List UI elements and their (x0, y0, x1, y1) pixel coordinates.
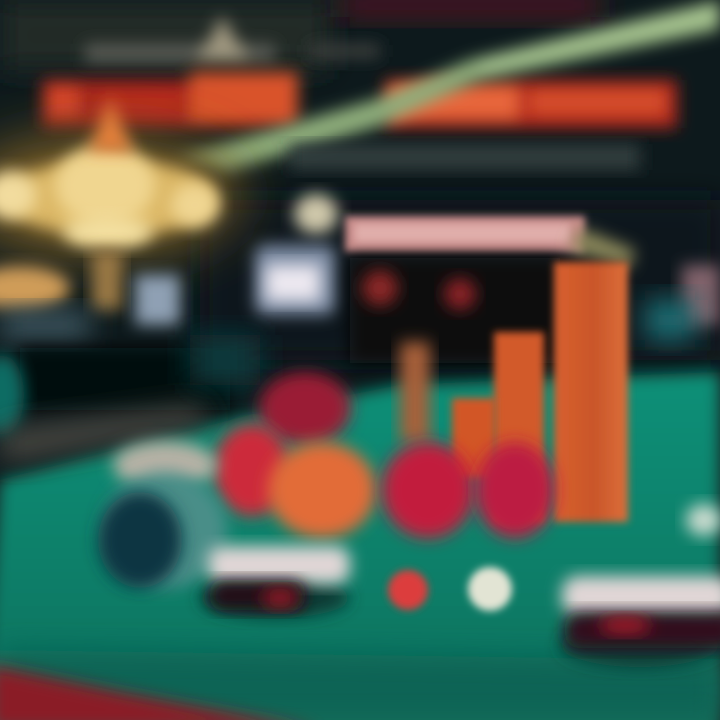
poker chips cluster (214, 372, 555, 538)
red title banner left (42, 72, 298, 128)
top faint title text band (85, 16, 380, 62)
dark table edge (0, 335, 260, 435)
chart dark background (350, 258, 560, 363)
single white chip (468, 567, 512, 611)
red title banner right (385, 80, 677, 128)
faint subtitle band (290, 144, 640, 170)
red dots (362, 270, 398, 306)
dark teal chip stack (98, 441, 227, 588)
chart panel (345, 216, 635, 363)
single red chip (388, 570, 428, 610)
chip stack front left (200, 546, 350, 618)
header edge light (570, 228, 635, 268)
green diagonal light beam (175, 0, 720, 172)
chip stack front right (560, 504, 720, 667)
green felt table (0, 372, 720, 720)
chart header band (345, 216, 585, 252)
chandelier glow (0, 98, 240, 310)
small screens, mid row (0, 194, 720, 340)
bar chart stacks (400, 262, 628, 522)
